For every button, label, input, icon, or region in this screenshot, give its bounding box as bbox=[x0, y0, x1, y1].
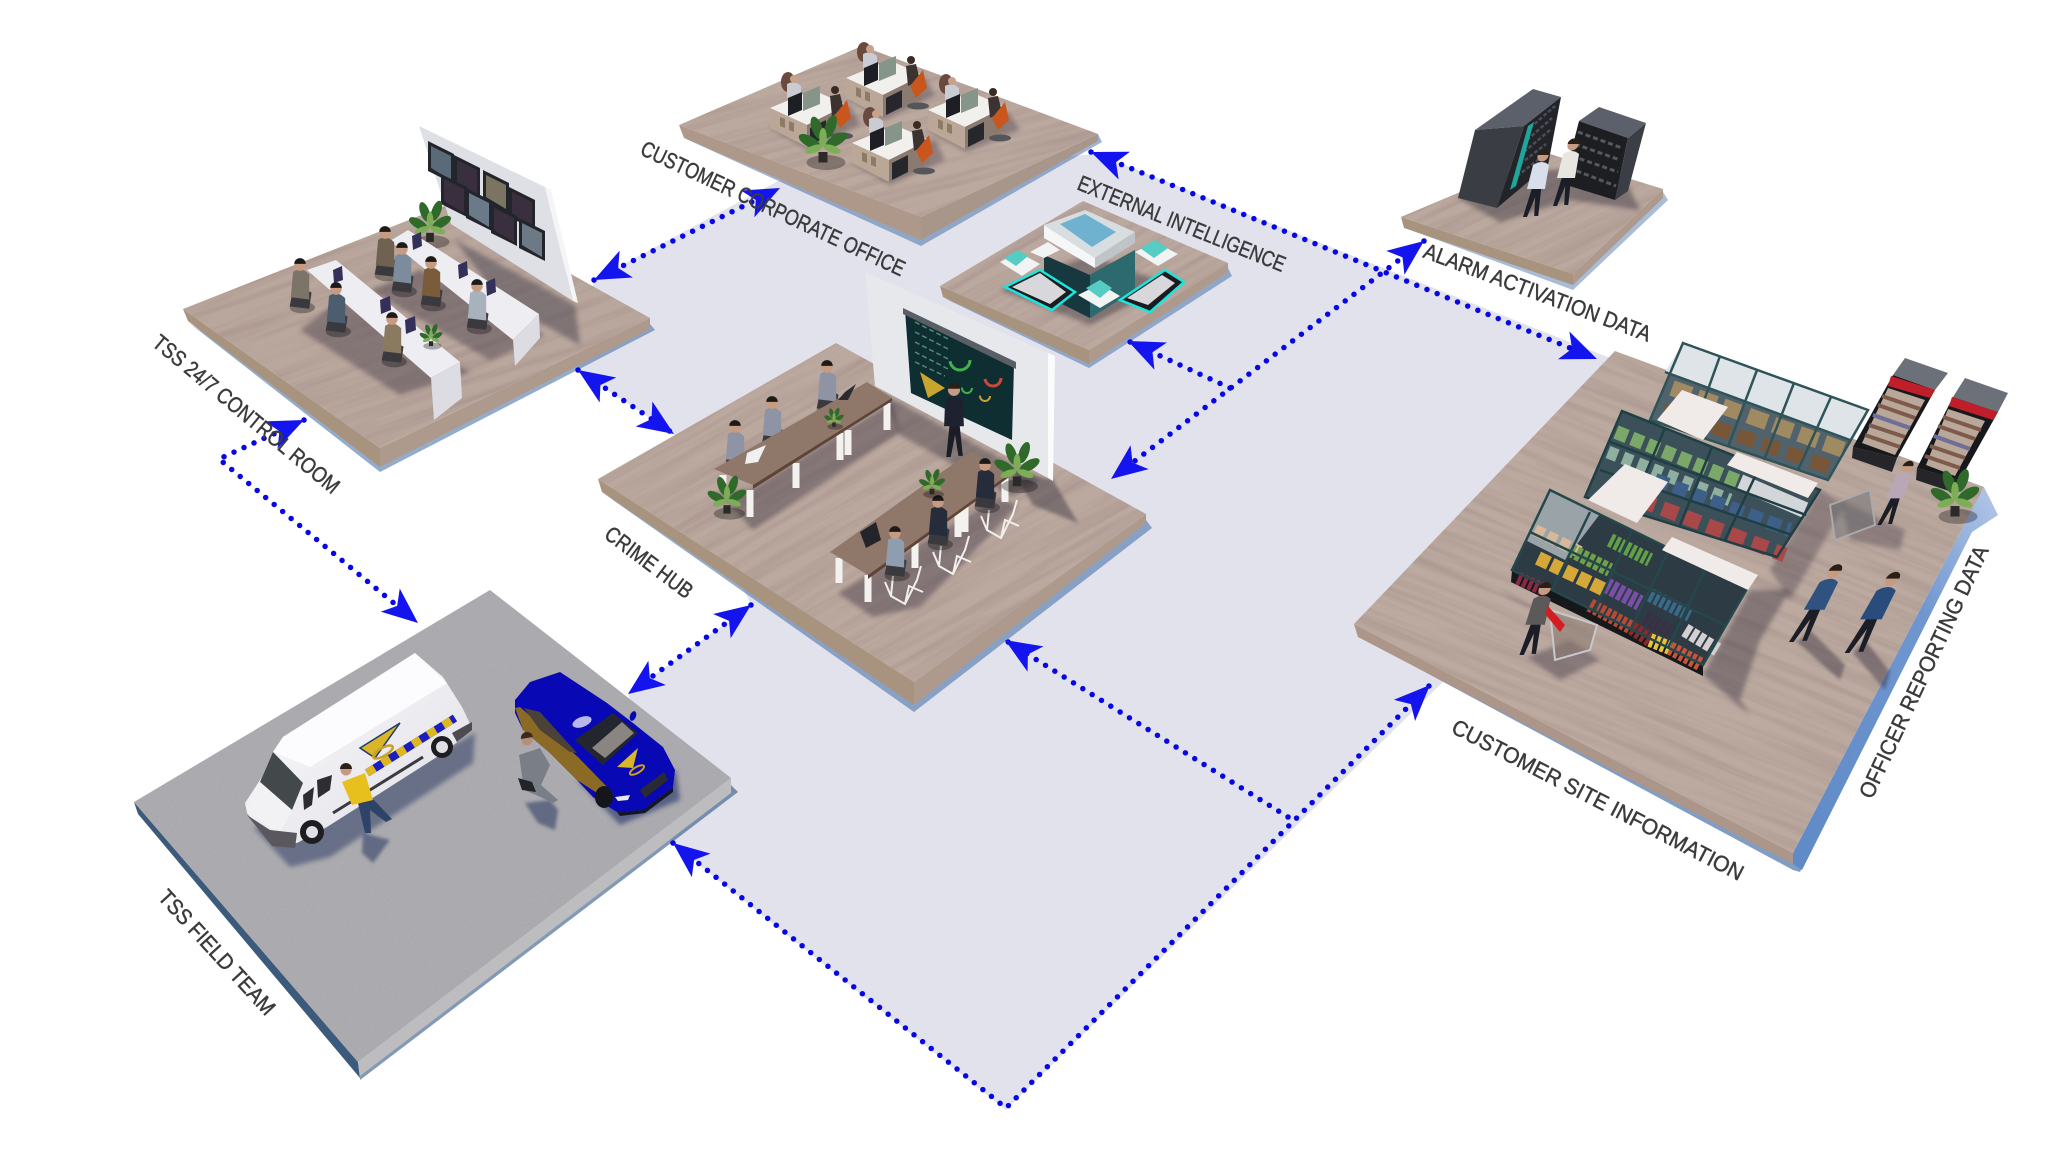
patrol car bbox=[515, 672, 680, 825]
platform sides bbox=[940, 263, 1228, 364]
platform sides bbox=[1354, 624, 1793, 864]
dashboard screen bbox=[903, 308, 1016, 440]
white canopies bbox=[1588, 390, 1818, 590]
arrow: crime hub to field team bbox=[628, 605, 751, 694]
arrow: branch to external intelligence bbox=[1128, 341, 1230, 388]
arrow: corporate office to customer site bbox=[1091, 152, 1597, 359]
platform sides bbox=[1401, 189, 1663, 285]
arrow: field team to customer site bbox=[673, 685, 1430, 1108]
desks bbox=[770, 42, 1020, 185]
arrow: control room to field team bbox=[219, 420, 418, 623]
van bbox=[245, 653, 475, 867]
front rack bbox=[1511, 490, 1748, 676]
platform sides bbox=[679, 125, 1098, 240]
video wall bbox=[419, 126, 580, 345]
officer in yellow vest bbox=[340, 763, 392, 863]
arrow: control room to corporate office bbox=[594, 188, 780, 280]
server racks and engineers bbox=[1458, 89, 1646, 222]
drinks fridges bbox=[1852, 358, 2008, 493]
platform sides bbox=[183, 309, 650, 467]
label: TSS field team: TSS FIELD TEAM bbox=[153, 884, 281, 1020]
panel: external intelligence bbox=[940, 201, 1232, 368]
icon: TSS logo bbox=[360, 723, 400, 761]
platform top bbox=[679, 48, 1098, 217]
crime hub tables and staff bbox=[706, 360, 1042, 617]
shoppers and officers bbox=[1517, 461, 1918, 690]
back rack bbox=[1650, 343, 1868, 480]
platform top bbox=[598, 343, 1146, 682]
icon: plant bbox=[796, 113, 850, 170]
label: customer corporate office: CUSTOMER CORPORATE OFFICE bbox=[637, 136, 909, 281]
platform top bbox=[183, 206, 650, 448]
officer on foot bbox=[518, 732, 558, 830]
panel: TSS field team bbox=[130, 590, 738, 1080]
data hub model bbox=[1000, 210, 1184, 325]
label: officer reporting data: OFFICER REPORTING DATA bbox=[1854, 541, 1994, 802]
platform top bbox=[130, 590, 731, 1070]
panel: crime hub bbox=[598, 308, 1152, 712]
label: customer site information: CUSTOMER SITE INFORMATION bbox=[1448, 714, 1748, 886]
label: TSS 24/7 control room: TSS 24/7 CONTROL ROOM bbox=[148, 330, 345, 499]
panel: TSS 24/7 control room bbox=[183, 126, 655, 472]
icon: plant bbox=[407, 199, 453, 248]
control desks bbox=[290, 226, 545, 420]
panel: customer corporate office bbox=[679, 42, 1102, 246]
platform top bbox=[1354, 351, 1984, 853]
store shelves bbox=[1500, 343, 1868, 725]
platform top bbox=[940, 201, 1228, 350]
platform sides bbox=[134, 778, 731, 1078]
arrow: alarm data to crime hub bbox=[1111, 241, 1424, 479]
panel: alarm activation data bbox=[1401, 89, 1668, 290]
middle rack bbox=[1585, 411, 1820, 557]
label: external intelligence: EXTERNAL INTELLIGENCE bbox=[1074, 170, 1289, 277]
platform top bbox=[1401, 154, 1663, 274]
wall with dashboard bbox=[865, 272, 1078, 523]
label: crime hub: CRIME HUB bbox=[600, 521, 698, 604]
label: alarm activation data: ALARM ACTIVATION DATA bbox=[1420, 238, 1655, 347]
arrow: control room to crime hub bbox=[578, 370, 674, 434]
platform sides bbox=[598, 479, 1146, 705]
icon: plant bbox=[1928, 467, 1982, 524]
panel: customer site information bbox=[1354, 341, 2008, 872]
background floor bbox=[578, 154, 1620, 1110]
arrow: branch to crime hub bbox=[1005, 640, 1288, 817]
